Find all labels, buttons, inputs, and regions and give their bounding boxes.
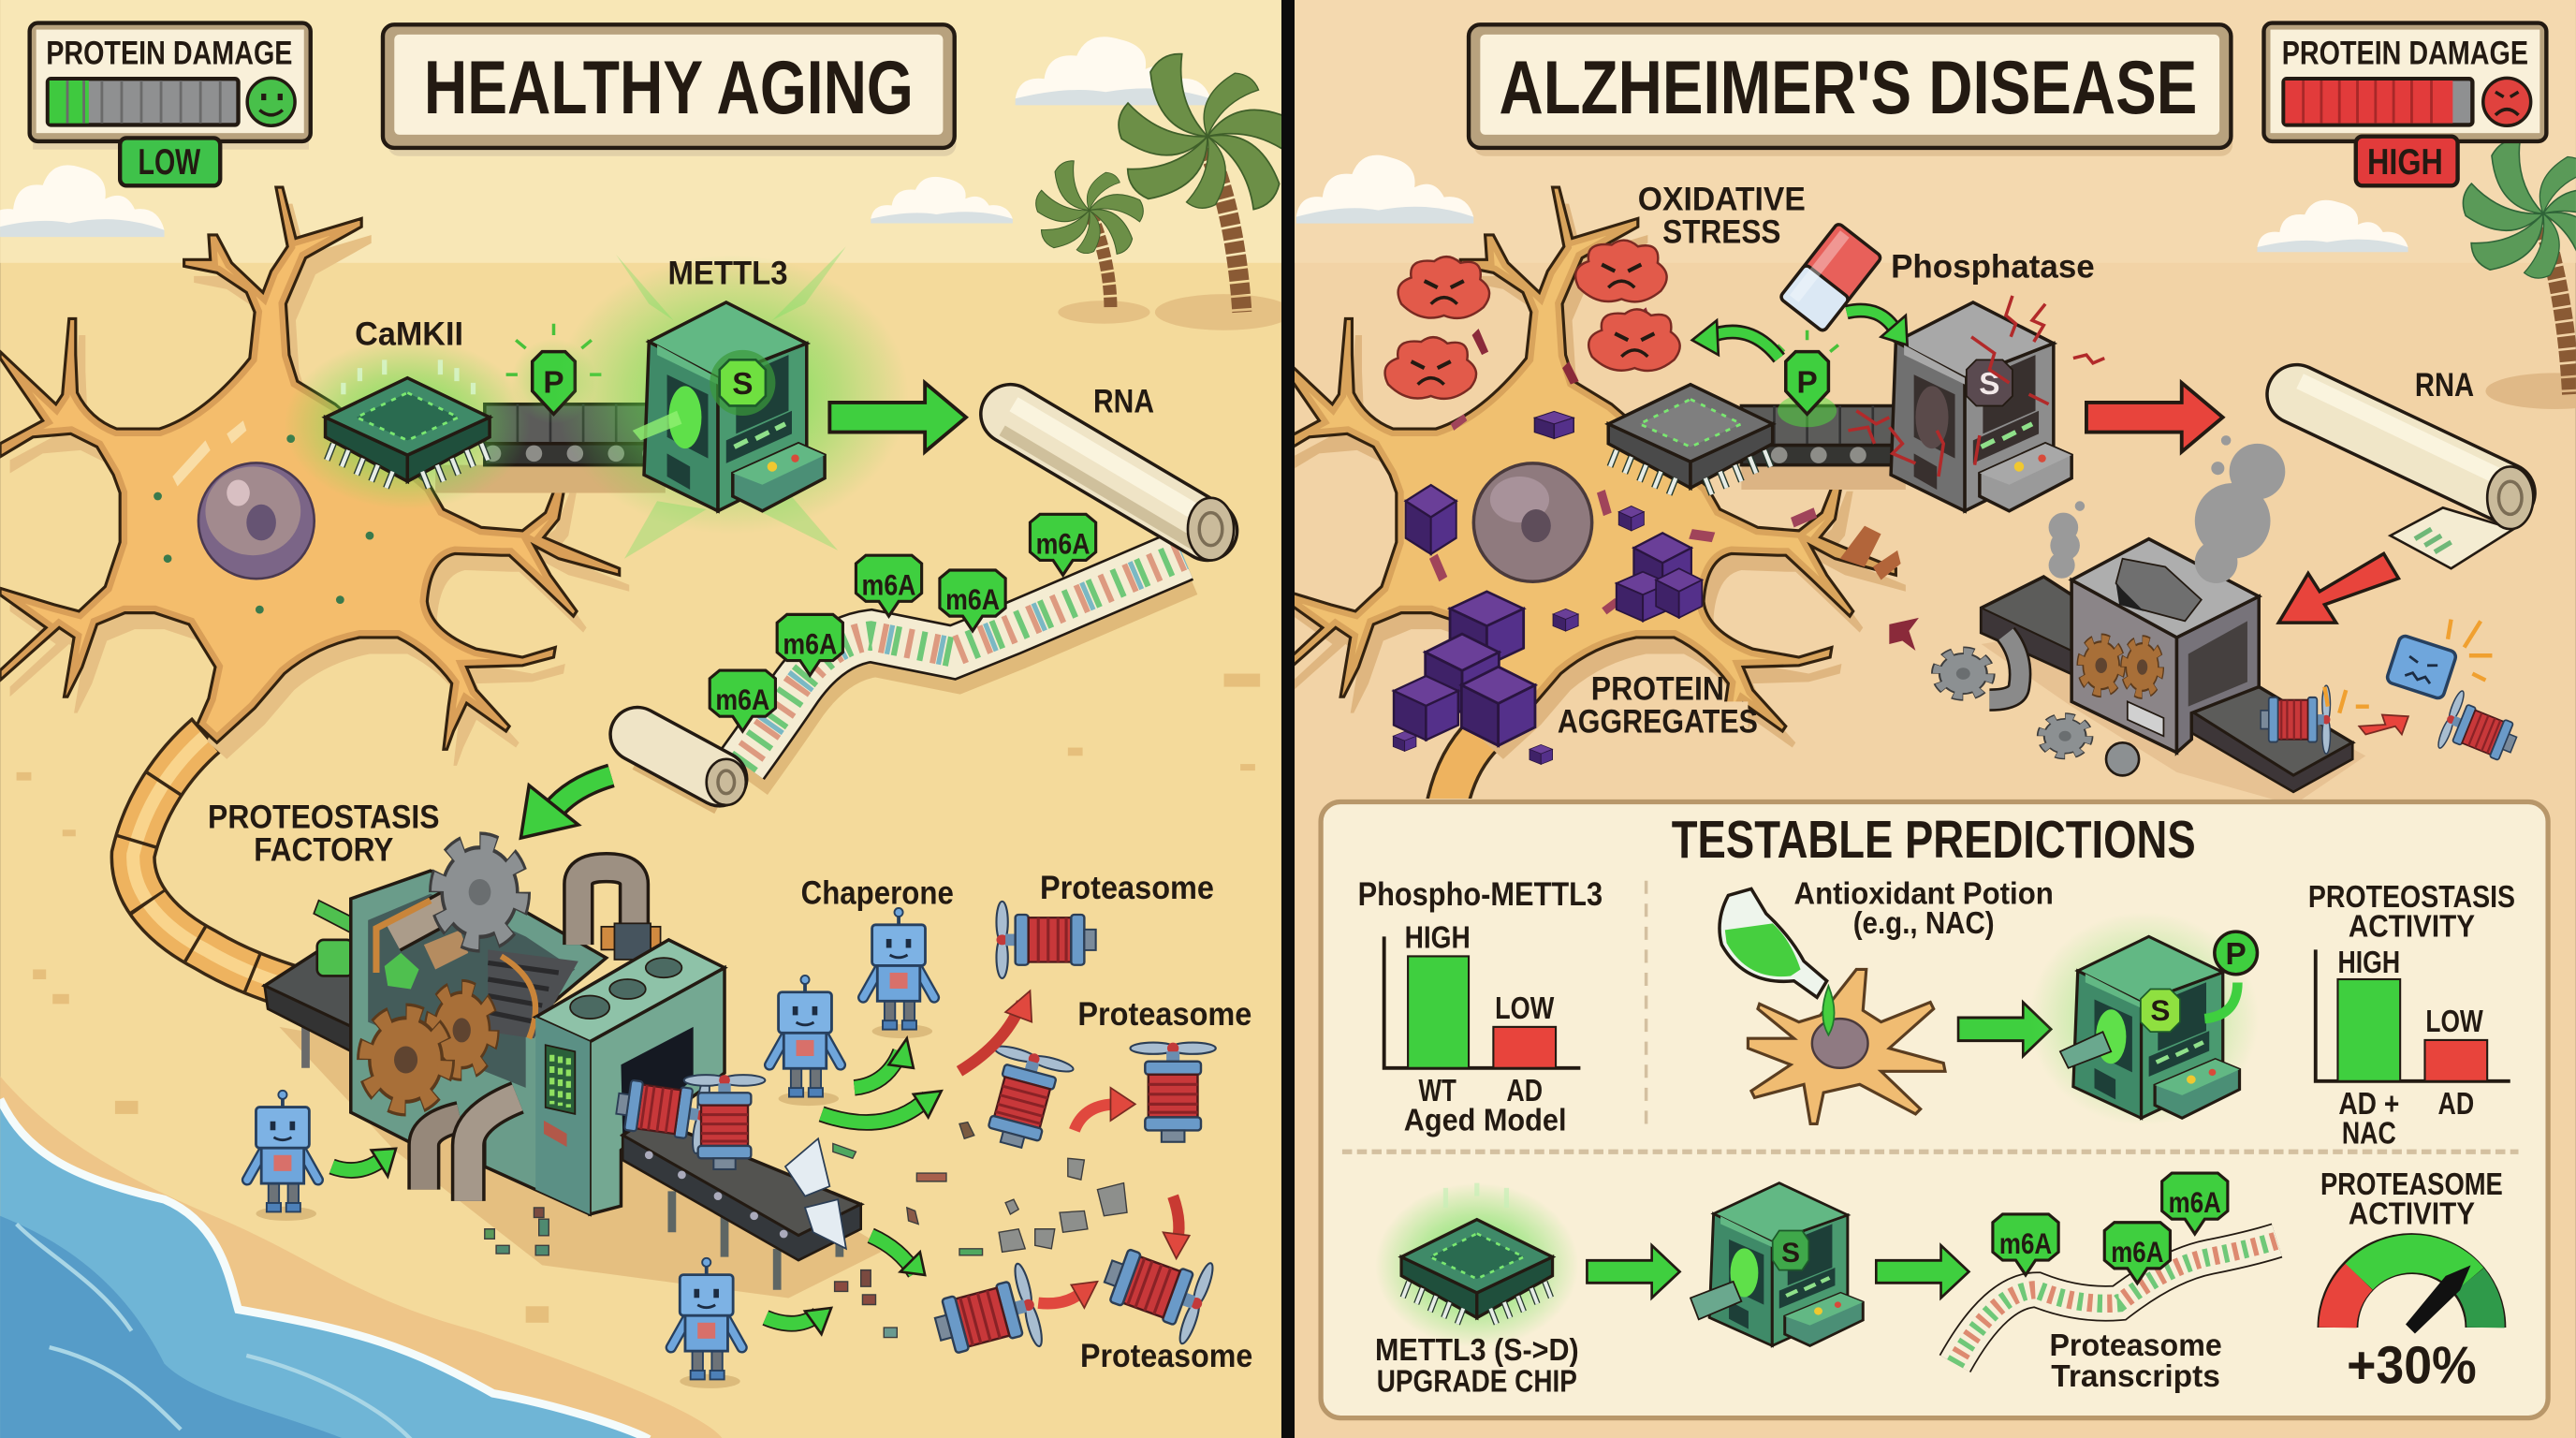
m6A tags: m6A	[945, 582, 1000, 616]
front block	[590, 968, 724, 1214]
chart: phospho-METTL3: WT	[1419, 1074, 1456, 1108]
divider	[1281, 0, 1295, 1438]
proteasomes	[927, 902, 1216, 1371]
robots: chaperones	[247, 908, 934, 1388]
title: healthy aging: HEALTHY AGING	[424, 46, 914, 130]
chart: phospho-METTL3: AD	[1506, 1074, 1543, 1108]
label: chaperone: Chaperone	[801, 874, 954, 911]
title: Alzheimer's disease: ALZHEIMER'S DISEASE	[1500, 46, 2197, 130]
chart: proteostasis activity: AD +	[2338, 1087, 2399, 1122]
main frame	[351, 871, 607, 1214]
neuron	[0, 187, 629, 766]
small red arrow	[2359, 714, 2408, 734]
chart: proteostasis activity	[2308, 880, 2515, 1151]
proteostasis factory machine	[265, 844, 887, 1298]
small red arrows	[959, 990, 1190, 1308]
label: proteostasis factory: FACTORY	[254, 832, 393, 869]
icon: phosphate pin	[506, 324, 601, 424]
tag: low	[120, 138, 220, 185]
label: upgrade chip	[1375, 1333, 1579, 1400]
tag: high: HIGH	[2367, 142, 2443, 183]
antioxidant potion label	[1794, 876, 2054, 941]
arrow: chip to machine	[1587, 1245, 1679, 1298]
antioxidant potion label: (e.g., NAC)	[1853, 906, 1995, 941]
RNA scroll: bottom roll	[637, 734, 746, 805]
green feeder	[314, 901, 353, 976]
labels: proteasome: Proteasome	[1077, 996, 1251, 1033]
small neuron	[1748, 969, 1945, 1123]
arrow: red to RNA	[2086, 383, 2223, 452]
icon: phosphate pin: P	[1796, 365, 1818, 400]
icon: restored machine: S	[2150, 993, 2170, 1027]
labels: proteasome	[1040, 870, 1252, 1374]
conveyor: broken	[1741, 405, 1906, 490]
axon with myelin segments	[133, 734, 304, 990]
output conveyor	[622, 1117, 861, 1290]
clouds	[0, 37, 1210, 237]
RNA ribbon with m6A marks	[742, 555, 1188, 781]
smoke	[2049, 435, 2285, 583]
top pipe	[578, 868, 634, 945]
m6A tags: m6A	[1036, 526, 1090, 560]
gauge: proteasome activity +30%: +30%	[2347, 1336, 2477, 1395]
label: CaMKII: CaMKII	[355, 316, 463, 353]
palm tree	[2461, 134, 2576, 409]
gauge: proteasome activity +30%: ACTIVITY	[2349, 1196, 2475, 1231]
left panel: healthy aging	[0, 0, 1299, 1438]
chart: proteostasis activity: LOW	[2425, 1005, 2483, 1039]
label: oxidative stress	[1638, 182, 1806, 251]
input conveyor	[261, 951, 349, 1068]
icon: phosphate pin	[1778, 330, 1838, 427]
labels: proteasome: Proteasome	[1040, 870, 1214, 906]
tag: low: LOW	[138, 142, 201, 183]
body	[2071, 580, 2176, 753]
heading: PROTEIN DAMAGE	[46, 35, 292, 71]
m6A tags: m6A	[2169, 1185, 2221, 1219]
label: proteostasis factory: PROTEOSTASIS	[208, 800, 440, 836]
broken factory	[1982, 539, 2365, 805]
icon: METTL3 machine: S	[732, 367, 753, 402]
label: proteasome transcripts: Transcripts	[2051, 1359, 2220, 1394]
bar	[48, 79, 239, 125]
RNA scroll: damaged	[2297, 381, 2533, 568]
proteasome on conveyor	[684, 1075, 765, 1169]
m6A tags: m6A	[2111, 1235, 2163, 1269]
icon: damaged METTL3 machine	[1889, 296, 2104, 511]
sand speckles	[17, 674, 1260, 1323]
chart: phospho-METTL3: HIGH	[1405, 921, 1471, 956]
brown gears	[366, 990, 492, 1106]
icon: phosphate badge	[2204, 932, 2257, 1019]
antioxidant potion label: Antioxidant Potion	[1794, 876, 2054, 911]
icon: restored machine	[2029, 912, 2259, 1125]
protein aggregates	[1393, 411, 1702, 764]
icon: METTL3 machine	[554, 246, 909, 559]
chart: phospho-METTL3: Phospho-METTL3	[1358, 876, 1603, 913]
right conveyor	[2191, 687, 2352, 775]
m6A tags	[710, 514, 1096, 731]
chart: phospho-METTL3: LOW	[1495, 991, 1555, 1026]
sparks	[2324, 620, 2492, 713]
label: METTL3: METTL3	[667, 256, 788, 292]
clouds	[1296, 155, 2408, 252]
label: proteasome transcripts	[2049, 1328, 2222, 1394]
broken proteasome	[2436, 689, 2525, 773]
title: Alzheimer's disease	[1469, 24, 2232, 156]
label: RNA: RNA	[2415, 367, 2474, 404]
gauge: proteasome activity +30%: PROTEASOME	[2320, 1167, 2503, 1202]
damage meter: low	[30, 23, 311, 185]
heading: PROTEIN DAMAGE	[2282, 35, 2528, 71]
chart: proteostasis activity: HIGH	[2337, 946, 2400, 980]
RNA scroll: top roll	[1003, 404, 1234, 560]
gray gear	[439, 844, 520, 941]
icon: sad face	[2483, 78, 2531, 125]
label: proteasome transcripts: Proteasome	[2049, 1328, 2222, 1363]
label: upgrade chip: METTL3 (S->D)	[1375, 1333, 1579, 1368]
label: oxidative stress: OXIDATIVE	[1638, 182, 1806, 218]
label: protein aggregates	[1558, 671, 1758, 741]
chart: proteostasis activity: AD	[2438, 1087, 2474, 1122]
ribbon: proteasome transcripts	[1955, 1240, 2277, 1364]
icon: CaMKII chip	[291, 343, 523, 505]
red debris near neuron	[1472, 307, 1919, 651]
gauge: proteasome activity +30%	[2320, 1167, 2503, 1395]
arrow: red toward factory	[2278, 553, 2398, 623]
green arc arrows	[1692, 311, 1908, 359]
title: healthy aging	[383, 24, 956, 156]
oxidative stress clouds	[1385, 241, 1680, 399]
lower pipes	[424, 1097, 518, 1201]
label: protein aggregates: PROTEIN	[1591, 671, 1724, 708]
damage meter: high	[2263, 23, 2546, 185]
left conveyor	[1982, 577, 2071, 674]
conveyor: CaMKII to METTL3	[435, 404, 666, 493]
m6A tags: m6A	[783, 627, 837, 661]
icon: inactive chip	[1608, 385, 1773, 494]
protein debris	[485, 1123, 1127, 1338]
small green arrows	[332, 1038, 942, 1334]
label: oxidative stress: STRESS	[1662, 214, 1781, 251]
chart: phospho-METTL3	[1358, 876, 1603, 1137]
icon: damaged METTL3 machine: S	[1979, 367, 2000, 402]
chart: proteostasis activity: ACTIVITY	[2349, 909, 2475, 944]
arrow: METTL3 to RNA	[829, 383, 966, 452]
icon: upgrade chip	[1375, 1183, 1579, 1347]
arrow: machine to transcripts	[1876, 1245, 1969, 1298]
icon: upgraded machine	[1690, 1183, 1863, 1345]
chart: phospho-METTL3: Aged Model	[1404, 1103, 1566, 1137]
icon: phosphate badge: P	[2226, 937, 2247, 972]
chart: proteostasis activity: PROTEOSTASIS	[2308, 880, 2515, 915]
white protein on conveyor	[785, 1138, 846, 1249]
panel: testable predictions	[1321, 801, 2548, 1418]
m6A tags: m6A	[862, 567, 915, 601]
bar	[2284, 79, 2472, 125]
right panel: Alzheimer's disease	[1277, 0, 2576, 1438]
damaged proteasome on conveyor	[2261, 685, 2330, 754]
palm trees	[1034, 48, 1299, 330]
label: upgrade chip: UPGRADE CHIP	[1377, 1365, 1577, 1400]
icon: antioxidant flask	[1720, 888, 1835, 1035]
labels: proteasome: Proteasome	[1080, 1338, 1252, 1374]
icon: eraser phosphatase	[1779, 223, 1882, 332]
icon: upgraded machine: S	[1781, 1238, 1800, 1269]
loose gray gears	[1938, 652, 2139, 775]
arrow: potion to machine	[1958, 1003, 2051, 1056]
label: proteostasis factory	[210, 805, 438, 861]
broken robot	[2386, 635, 2457, 699]
m6A tags	[1993, 1173, 2228, 1284]
gears	[2082, 639, 2121, 691]
pipe joint	[601, 923, 661, 960]
arrow: RNA to factory	[520, 775, 611, 838]
label: protein aggregates: AGGREGATES	[1558, 704, 1758, 741]
heading: TESTABLE PREDICTIONS	[1672, 810, 2196, 869]
icon: happy face	[247, 78, 295, 125]
label: phosphatase: Phosphatase	[1891, 249, 2095, 286]
m6A tags: m6A	[1999, 1226, 2052, 1260]
proteasome entering tunnel	[612, 1065, 711, 1154]
neuron with damage	[1277, 187, 1906, 814]
chart: proteostasis activity: NAC	[2342, 1116, 2396, 1151]
m6A tags: m6A	[715, 682, 769, 716]
label: RNA: RNA	[1093, 384, 1154, 420]
icon: phosphate pin: P	[543, 365, 564, 400]
